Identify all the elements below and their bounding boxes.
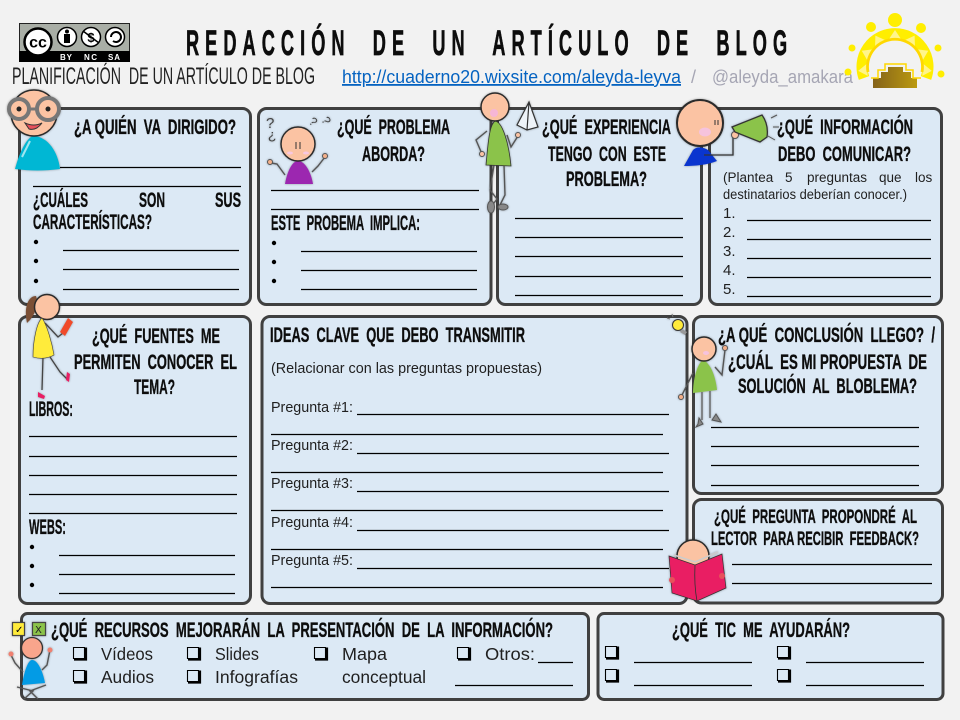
icon: Creative Commons BY-NC-SA badge: SA bbox=[108, 53, 120, 62]
separator slash: / bbox=[691, 67, 696, 87]
numbered list: 2. bbox=[723, 224, 736, 241]
checklist: Audios bbox=[101, 667, 154, 687]
question lines: Pregunta #4: bbox=[271, 514, 353, 531]
instructions: (Plantea bbox=[723, 170, 774, 185]
note: (Relacionar con las preguntas propuestas) bbox=[271, 360, 542, 377]
subtitle: PLANIFICACIÓN DE UN ARTÍCULO DE BLOG bbox=[12, 63, 315, 90]
checklist: Mapa bbox=[342, 644, 387, 664]
panel: a quién va dirigido bbox=[20, 108, 250, 304]
heading: ¿QUÉ EXPERIENCIA bbox=[542, 116, 671, 139]
heading: IDEAS CLAVE QUE DEBO TRANSMITIR bbox=[270, 324, 525, 347]
instructions: destinatarios deberían conocer.) bbox=[723, 187, 907, 202]
icon: person behind red book bbox=[669, 540, 726, 601]
icon: puzzled purple person: ? bbox=[266, 115, 274, 132]
icon: puzzled purple person: ? bbox=[268, 129, 276, 145]
heading: ¿QUÉ PROBLEMA bbox=[337, 116, 450, 139]
checklist: Vídeos bbox=[101, 644, 153, 664]
icon: puzzled purple person bbox=[266, 114, 334, 184]
subheading: características: SUS bbox=[215, 189, 241, 212]
checklist: conceptual bbox=[342, 667, 426, 687]
question lines: Pregunta #5: bbox=[271, 552, 353, 569]
website link: http://cuaderno20.wixsite.com/aleyda-leyva bbox=[342, 67, 682, 87]
icon: puzzled purple person: ? bbox=[318, 114, 334, 127]
numbered list: 3. bbox=[723, 243, 736, 260]
icon: Creative Commons BY-NC-SA badge: NC bbox=[84, 53, 97, 62]
icon: person with yes and no boxes: X bbox=[35, 625, 42, 636]
heading bbox=[711, 506, 919, 550]
icon: Creative Commons BY-NC-SA badge: BY bbox=[60, 53, 73, 62]
checklist: Otros: bbox=[485, 644, 535, 664]
instructions: que bbox=[879, 170, 902, 185]
subheading: características: ¿CUÁLES bbox=[33, 189, 88, 212]
numbered list: 5. bbox=[723, 281, 736, 298]
heading bbox=[777, 115, 913, 166]
panel: qué fuentes bbox=[20, 316, 250, 604]
icon: person with glasses bbox=[9, 90, 60, 170]
panel: qué información debo comunicar bbox=[710, 108, 942, 304]
question lines: Pregunta #1: bbox=[271, 399, 353, 416]
panel: recursos bbox=[22, 614, 588, 700]
checklist: Infografías bbox=[215, 667, 298, 687]
heading: PERMITEN CONOCER EL bbox=[74, 351, 237, 374]
subheading: características: SON bbox=[139, 189, 165, 212]
subheading: características: CARACTERÍSTICAS? bbox=[33, 211, 152, 234]
heading: TENGO CON ESTE bbox=[548, 143, 666, 166]
question lines: Pregunta #3: bbox=[271, 475, 353, 492]
icon: sun logo with pyramid bbox=[844, 13, 944, 88]
numbered list bbox=[723, 205, 931, 298]
heading bbox=[542, 116, 671, 191]
heading bbox=[718, 323, 935, 398]
instructions: preguntas bbox=[807, 170, 867, 185]
heading: ¿QUÉ FUENTES ME bbox=[92, 325, 220, 348]
author handle: @aleyda_amakara bbox=[712, 67, 854, 88]
numbered list: 1. bbox=[723, 205, 736, 222]
heading bbox=[74, 325, 237, 399]
panel: conclusión bbox=[694, 316, 942, 494]
subheading: implica: ESTE PROBEMA IMPLICA: bbox=[271, 212, 420, 235]
icon: person with megaphone bbox=[677, 100, 779, 166]
icon: light bulb bbox=[667, 314, 687, 335]
icon: green person with raised hand bbox=[678, 337, 728, 427]
panel: pregunta al lector bbox=[694, 500, 942, 603]
icon: girl reading bbox=[26, 294, 73, 399]
icon: Creative Commons BY-NC-SA badge bbox=[19, 24, 130, 62]
heading: ABORDA? bbox=[362, 143, 425, 166]
icon: Creative Commons BY-NC-SA badge: cc bbox=[29, 34, 47, 52]
panel: qué tic bbox=[598, 614, 943, 700]
heading: ¿QUÉ TIC ME AYUDARÁN? bbox=[672, 619, 850, 642]
icon: person with yes and no boxes: ✓ bbox=[15, 625, 23, 636]
panel: qué experiencia tengo bbox=[498, 108, 702, 304]
heading bbox=[337, 116, 450, 166]
icon: Creative Commons BY-NC-SA badge: $ bbox=[87, 30, 95, 45]
instructions bbox=[723, 170, 933, 202]
heading: ¿QUÉ RECURSOS MEJORARÁN LA PRESENTACIÓN DE LA INFORMACIÓN? bbox=[51, 618, 553, 642]
instructions: 5 bbox=[785, 170, 793, 185]
heading: ¿A QUIÉN VA DIRIGIDO? bbox=[74, 116, 236, 139]
checklist bbox=[74, 644, 573, 687]
question lines: Pregunta #2: bbox=[271, 437, 353, 454]
subheading: webs: WEBS: bbox=[29, 516, 66, 539]
checklist bbox=[606, 646, 924, 686]
heading: PROBLEMA? bbox=[566, 168, 647, 191]
panel: ideas clave bbox=[262, 316, 687, 604]
subheading: características bbox=[33, 189, 241, 234]
title: REDACCIÓN DE UN ARTÍCULO DE BLOG bbox=[186, 24, 787, 63]
heading: TEMA? bbox=[134, 376, 175, 399]
checklist: Slides bbox=[215, 644, 259, 664]
question lines bbox=[271, 399, 669, 588]
instructions: los bbox=[915, 170, 933, 185]
subheading: libros: LIBROS: bbox=[29, 398, 73, 421]
icon: puzzled purple person: ? bbox=[306, 114, 320, 129]
panel: qué problema aborda bbox=[258, 108, 491, 304]
numbered list: 4. bbox=[723, 262, 736, 279]
icon: person with yes and no boxes bbox=[8, 622, 52, 699]
icon: person with paper plane bbox=[476, 93, 538, 213]
